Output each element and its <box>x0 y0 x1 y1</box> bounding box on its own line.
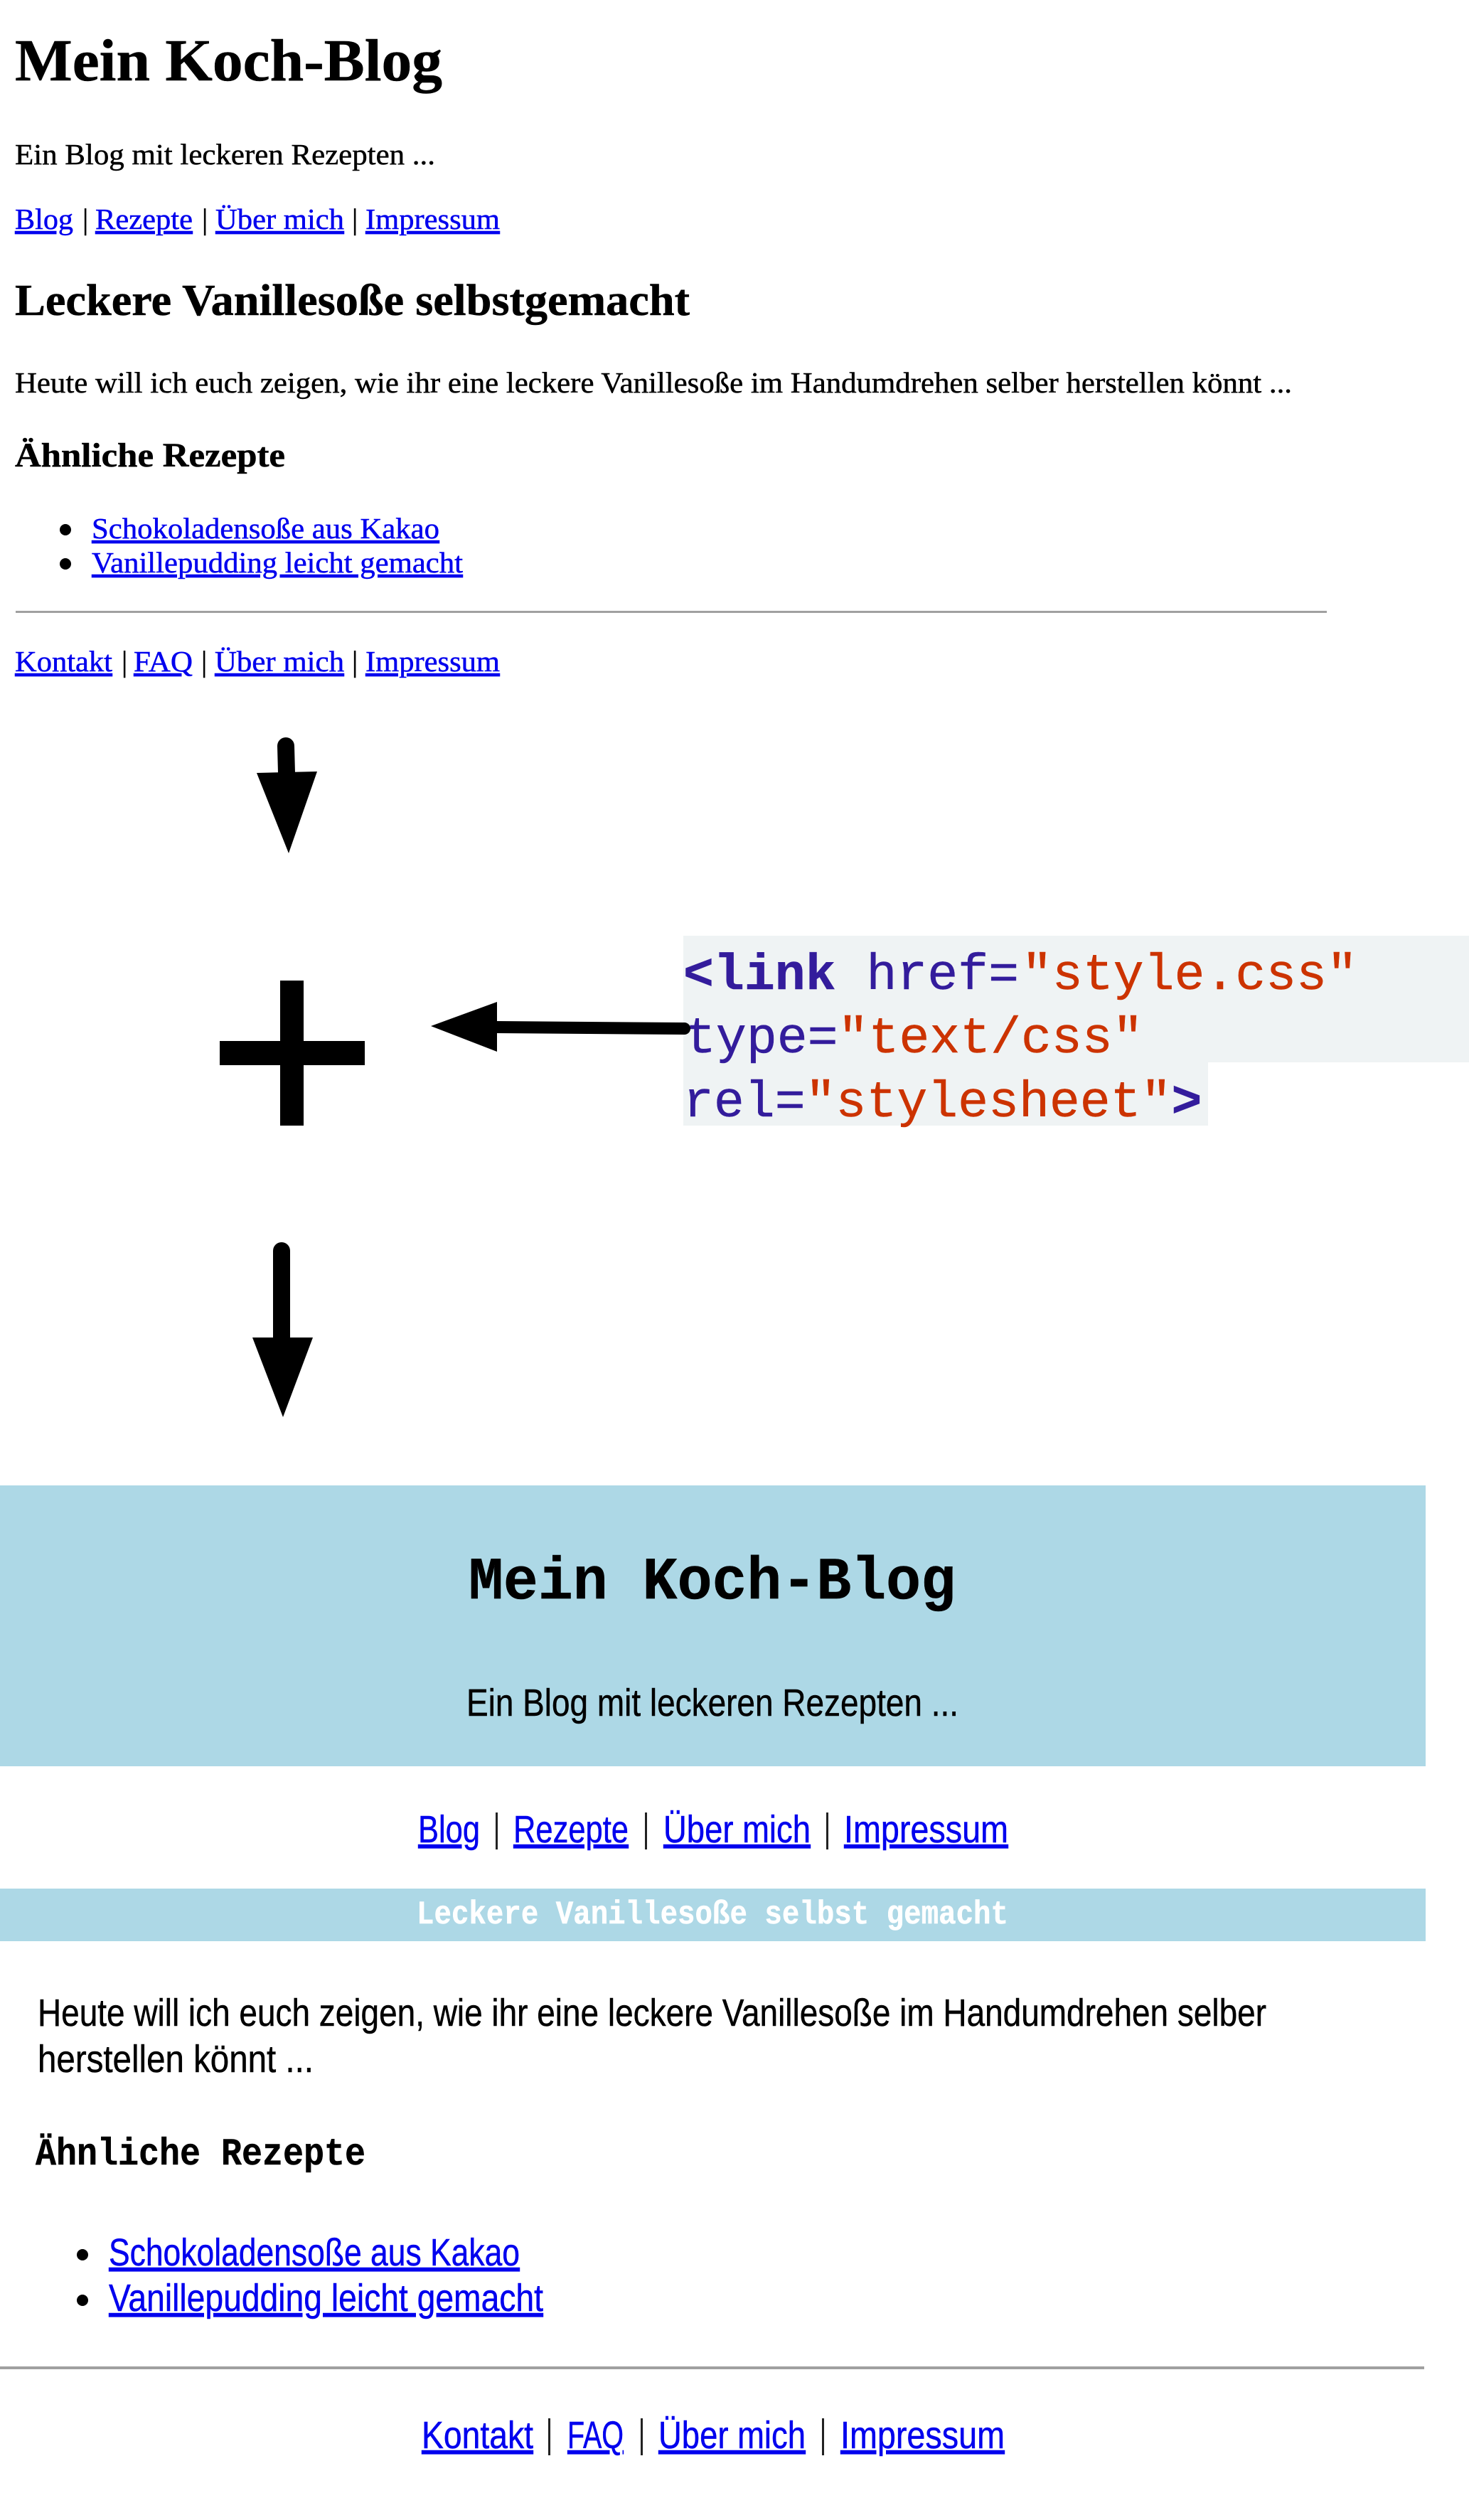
code snippet: link element: <link href="style.css" <box>683 947 1357 1005</box>
panel: styled HTML page <box>0 1485 1426 2457</box>
related recipes heading: Ähnliche Rezepte <box>15 437 285 474</box>
styled footer navigation <box>422 2414 1005 2457</box>
panel: unstyled HTML page <box>15 28 1327 678</box>
styled related recipes list: Vanillepudding leicht gemacht <box>109 2277 543 2319</box>
footer navigation: Kontakt <box>15 645 113 678</box>
footer navigation: Impressum <box>365 645 500 678</box>
article heading: Leckere Vanillesoße selbstgemacht <box>15 277 690 325</box>
styled related recipes list: Schokoladensoße aus Kakao <box>109 2231 520 2274</box>
styled footer navigation: Über mich <box>658 2414 806 2457</box>
article text: Heute will ich euch zeigen, wie ihr eine leckere Vanillesoße im Handumdrehen selber herstellen könnt ... <box>15 366 1292 399</box>
related recipes list: Vanillepudding leicht gemacht <box>92 546 464 579</box>
related recipes list: Schokoladensoße aus Kakao <box>92 512 439 545</box>
styled top navigation: Blog <box>418 1808 480 1851</box>
styled article heading bar <box>0 1889 1426 1941</box>
icon: plus sign <box>220 981 365 1126</box>
footer navigation: Über mich <box>215 645 344 678</box>
footer navigation: | <box>201 645 207 678</box>
styled article heading bar: Leckere Vanillesoße selbst gemacht <box>417 1896 1008 1933</box>
styled article text <box>38 1992 1266 2081</box>
code snippet: link element: type="text/css" <box>685 1010 1143 1068</box>
top navigation <box>15 203 500 235</box>
styled article text: herstellen könnt ... <box>38 2038 314 2081</box>
arrow: down to styled page <box>252 1242 313 1417</box>
styled footer navigation: FAQ <box>567 2414 624 2457</box>
arrow: from code snippet to plus <box>431 1002 690 1052</box>
footer navigation: | <box>122 645 127 678</box>
styled related recipes list <box>77 2231 543 2319</box>
top navigation: Blog <box>15 203 73 235</box>
top navigation: | <box>352 203 358 235</box>
styled article text: Heute will ich euch zeigen, wie ihr eine leckere Vanillesoße im Handumdrehen selber <box>38 1992 1266 2034</box>
styled footer navigation: Impressum <box>840 2414 1005 2457</box>
top navigation: | <box>82 203 88 235</box>
related recipes list <box>60 512 464 579</box>
subtitle: Ein Blog mit leckeren Rezepten ... <box>15 138 435 171</box>
styled subtitle: Ein Blog mit leckeren Rezepten ... <box>466 1682 958 1724</box>
styled top navigation: Über mich <box>663 1808 811 1851</box>
styled related recipes heading: Ähnliche Rezepte <box>36 2133 365 2177</box>
styled title: Mein Koch-Blog <box>469 1549 956 1617</box>
styled top navigation <box>418 1808 1008 1851</box>
styled footer navigation: Kontakt <box>422 2414 533 2457</box>
footer navigation: FAQ <box>134 645 193 678</box>
styled top navigation: Rezepte <box>513 1808 629 1851</box>
footer navigation <box>15 645 500 678</box>
footer navigation: | <box>352 645 358 678</box>
header banner <box>0 1485 1426 1766</box>
styled top navigation: Impressum <box>844 1808 1008 1851</box>
title: Mein Koch-Blog: Mein Koch-Blog <box>15 28 442 94</box>
top navigation: Rezepte <box>95 203 193 235</box>
code snippet: link element: rel="stylesheet"> <box>683 1074 1202 1132</box>
code snippet: link element <box>683 936 1469 1132</box>
arrow: down from plain page <box>257 737 317 853</box>
top navigation: Über mich <box>215 203 344 235</box>
top navigation: | <box>202 203 208 235</box>
top navigation: Impressum <box>365 203 500 235</box>
